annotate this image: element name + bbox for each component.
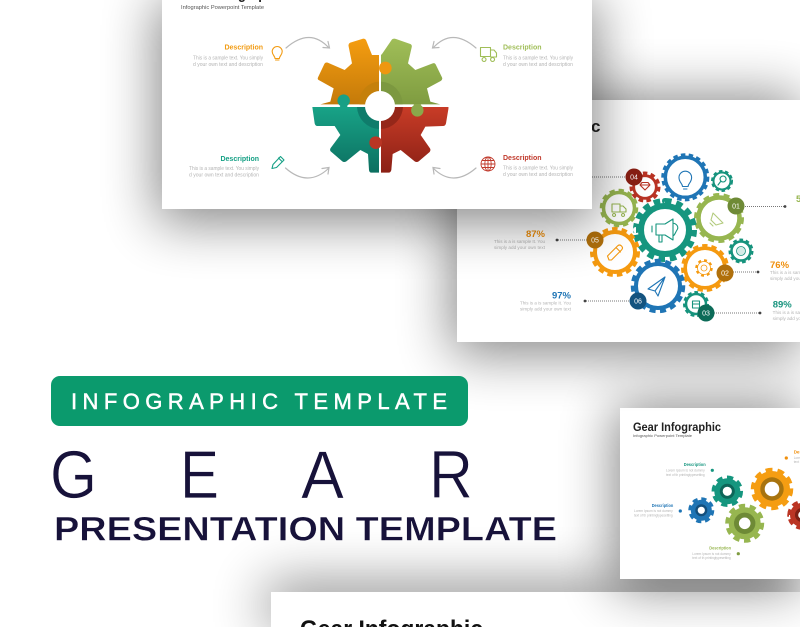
block: orange description: This is a sample text. You simply — [193, 56, 263, 62]
gear: small teal globe — [730, 240, 752, 262]
block: red description: This is a sample text. You simply — [503, 166, 573, 172]
title: gear: A — [301, 437, 345, 513]
label: teal description: text of th printingtypesetting — [666, 473, 705, 477]
gear: green — [727, 506, 762, 541]
gear: red — [632, 174, 658, 200]
badge 01: 01 — [732, 204, 740, 210]
subtitle: presentation template: PRESENTATION TEMPLATE — [54, 510, 557, 548]
card: gear row slide — [615, 405, 800, 589]
piece: green — [381, 39, 442, 104]
icon: globe — [736, 246, 746, 256]
title: gear: E — [180, 437, 219, 513]
tab: teal — [337, 94, 350, 107]
stat: 97%: 97% — [552, 291, 572, 302]
block: red description — [503, 155, 573, 178]
badge 02 — [716, 264, 734, 282]
block: red description: d your own text and description — [503, 172, 573, 178]
gear: blue bottom — [634, 262, 682, 310]
tab: green — [411, 104, 424, 117]
stat: 97%: This is a is sample It. You — [520, 300, 572, 306]
icon: magnifier — [718, 176, 726, 185]
block: green description — [503, 44, 573, 68]
gear: blue — [690, 499, 713, 522]
arrow: red side — [433, 168, 476, 178]
label: teal description: Lorem Ipsum is not dummy — [666, 469, 705, 473]
puzzle gear — [312, 39, 448, 173]
card: bottom slide — [266, 584, 800, 627]
badge 06 — [630, 292, 646, 310]
gear: orange right — [684, 246, 726, 290]
icon: shop — [692, 301, 700, 308]
tab: red — [369, 136, 382, 149]
piece: teal — [312, 107, 379, 173]
icon: megaphone — [652, 219, 678, 242]
card: puzzle gear slide — [157, 0, 597, 222]
hub shading — [357, 82, 403, 129]
icon: paper plane — [648, 277, 665, 296]
block: teal description: d your own text and description — [189, 172, 259, 178]
label: teal description — [666, 462, 714, 477]
label: orange description — [785, 450, 800, 464]
label: blue description: text of th printingtypesetting — [634, 513, 673, 517]
block: orange description: d your own text and description — [193, 62, 263, 68]
badge 05 — [586, 232, 604, 248]
tab: orange — [379, 62, 392, 74]
heading: partially hidden: Gear Infographic — [464, 117, 600, 136]
gear: green truck — [602, 191, 636, 225]
stat: 87%: 87% — [526, 229, 546, 240]
badge 05: 05 — [591, 238, 599, 244]
arrow: teal side — [286, 168, 329, 178]
gear: teal centre — [636, 201, 694, 259]
block: orange description: Description — [224, 44, 263, 52]
block: green description: Description — [503, 44, 542, 52]
stat: 76%: 76% — [770, 260, 790, 271]
icon: truck — [480, 48, 496, 61]
label: blue description: Description — [652, 503, 674, 508]
title: gear: G — [50, 437, 97, 513]
banner: infographic template: INFOGRAPHIC TEMPLATE — [71, 389, 447, 414]
badge 04: 04 — [630, 174, 638, 182]
gear: small teal bottom — [684, 292, 708, 316]
badge 03: 03 — [702, 310, 710, 318]
piece: orange — [318, 39, 379, 104]
stat: 89%: 89% — [773, 300, 792, 311]
block: green description: This is a sample text. You simply — [503, 56, 573, 62]
block: red description: Description — [503, 155, 542, 162]
stat: 87%: This is a is sample It. You — [494, 239, 546, 244]
stat: 97% — [520, 291, 572, 312]
stat: 76% — [770, 260, 800, 281]
badge 06: 06 — [634, 298, 642, 306]
gear: teal — [713, 477, 741, 505]
badge 02: 02 — [721, 270, 729, 278]
gear: green right — [696, 196, 742, 240]
block: teal description — [189, 156, 259, 178]
card: mechanism slide — [452, 96, 800, 354]
hub hole — [365, 91, 395, 121]
subheading: Infographic Powerpoint Template — [633, 433, 693, 438]
label: green description: Lorem Ipsum is not dummy — [692, 552, 731, 556]
icon: bell — [710, 213, 723, 226]
stat: 97%: simply add your own text — [520, 307, 572, 312]
subheading: Infographic Powerpoint Template — [181, 5, 264, 11]
label: blue description: Lorem Ipsum is not dummy — [634, 509, 673, 513]
gear: orange — [753, 470, 791, 508]
leader lines — [556, 177, 786, 314]
label: green description: Description — [709, 545, 731, 550]
stat: 89% — [773, 300, 800, 321]
heading: gear infographic: Gear Infographic — [633, 420, 721, 434]
banner: infographic template — [51, 376, 468, 426]
label: green description — [692, 545, 740, 560]
gear: red — [789, 502, 800, 528]
label: teal description: Description — [684, 462, 706, 467]
badge 03 — [698, 304, 714, 322]
block: teal description: This is a sample text. You simply — [189, 166, 259, 172]
icon: truck — [612, 204, 626, 216]
label: green description: text of th printingtypesetting — [692, 556, 731, 560]
arrow: green side — [432, 38, 476, 48]
piece: red — [381, 107, 448, 173]
gear: blue top — [664, 156, 707, 199]
badge 01 — [728, 198, 744, 214]
title: gear: R — [429, 437, 473, 513]
icon: bulb — [272, 46, 282, 60]
arrow: orange side — [286, 38, 330, 48]
stat: 87% — [494, 229, 546, 250]
gear: orange left — [592, 230, 638, 274]
label: blue description — [634, 503, 682, 517]
block: orange description — [193, 44, 263, 68]
icon: diamond — [640, 182, 650, 190]
title: gear — [50, 437, 473, 513]
icon: pencil — [272, 156, 284, 168]
icon: pencil — [608, 245, 622, 260]
block: green description: d your own text and description — [503, 62, 573, 68]
block: teal description: Description — [220, 156, 259, 163]
icon: cog — [696, 260, 712, 276]
gear: small teal magnifier — [712, 172, 732, 190]
icon: globe — [481, 157, 495, 171]
stat: 87%: simply add your own text — [494, 245, 546, 250]
badge 04 — [626, 168, 642, 186]
icon: bulb — [679, 171, 692, 189]
